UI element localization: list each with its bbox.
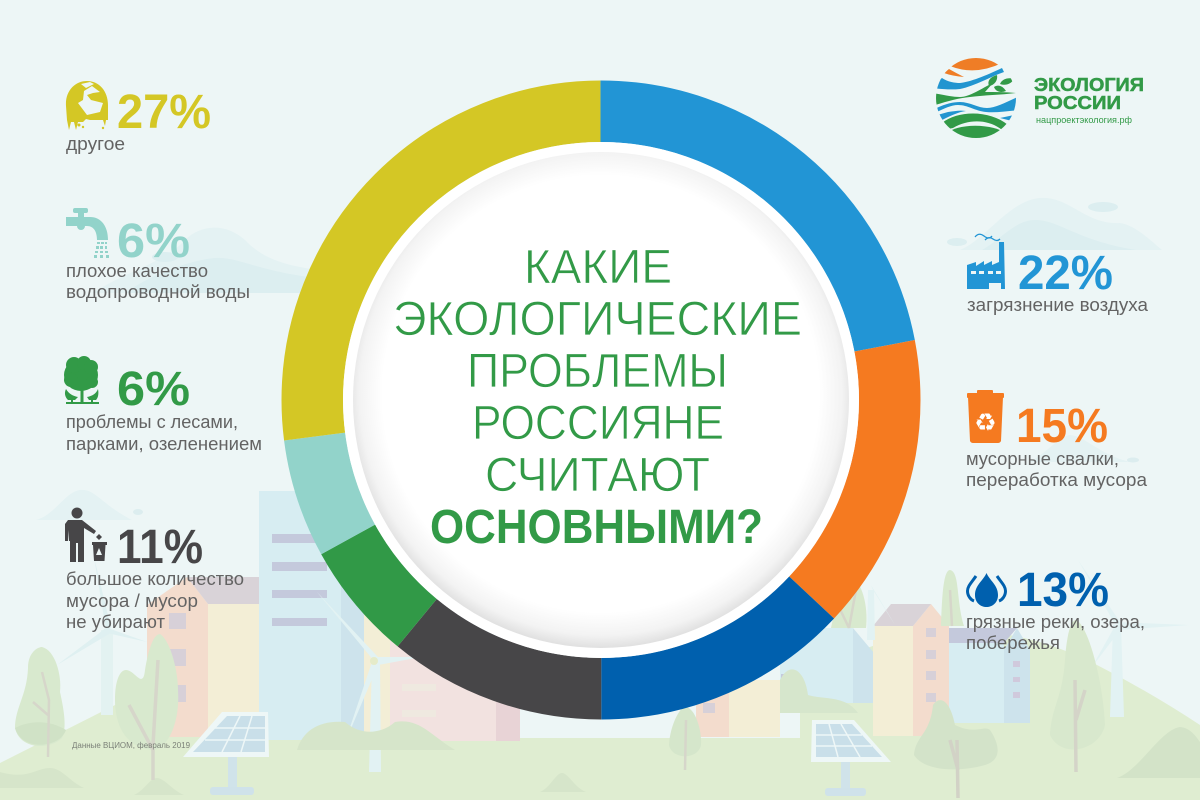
- logo url: нацпроектэкология.рф: [1036, 115, 1133, 125]
- logo wordmark: ЭКОЛОГИЯ: [1034, 75, 1144, 95]
- label: водопроводной воды: [66, 281, 250, 302]
- label: [966, 448, 1148, 490]
- source note: Данные ВЦИОМ, февраль 2019: [72, 741, 191, 750]
- title: ОСНОВНЫМИ?: [430, 501, 763, 554]
- title: СЧИТАЮТ: [485, 449, 710, 502]
- label: парками, озеленением: [66, 433, 262, 454]
- label: [966, 611, 1145, 653]
- item: 13% rivers: [966, 564, 1145, 653]
- icon: recycling bin: ♻: [974, 408, 997, 437]
- icon: melting globe: [66, 81, 108, 130]
- segment: 6% tap water: [312, 111, 890, 689]
- logo emblem: [936, 58, 1016, 138]
- background: mountains and clouds: [36, 198, 1162, 520]
- logo wordmark: РОССИИ: [1034, 93, 1121, 113]
- value: 6%: [117, 215, 190, 268]
- label: другое: [66, 133, 125, 154]
- center circle: [343, 142, 859, 658]
- label: большое количество: [66, 568, 244, 589]
- title: КАКИЕ: [524, 241, 672, 294]
- item: 6% tap water: [66, 208, 250, 302]
- label: [66, 568, 244, 632]
- label: плохое качество: [66, 260, 208, 281]
- logo: [936, 58, 1143, 138]
- label: грязные реки, озера,: [966, 611, 1145, 632]
- segment: 27% other: [312, 111, 890, 689]
- label: переработка мусора: [966, 469, 1148, 490]
- label: не убирают: [66, 611, 166, 632]
- value: 27%: [117, 86, 211, 139]
- title: ЭКОЛОГИЧЕСКИЕ: [393, 293, 802, 346]
- title: РОССИЯНЕ: [472, 397, 724, 450]
- label: проблемы с лесами,: [66, 411, 238, 432]
- label: [66, 260, 250, 302]
- icon: trees: [64, 356, 99, 404]
- label: [66, 411, 262, 454]
- label: мусора / мусор: [66, 590, 198, 611]
- logo wordmark: [1034, 75, 1144, 113]
- segment: 15% dumps: [312, 111, 890, 689]
- item: 6% forests: [64, 356, 262, 454]
- background: central and right wind turbines: [317, 560, 1189, 772]
- background: green hills and ground: [0, 631, 1200, 800]
- donut chart: [312, 111, 890, 689]
- background: left wind turbine: [57, 557, 147, 715]
- title: [393, 241, 802, 554]
- item: 11% litter: [65, 508, 244, 632]
- value: 13%: [1017, 564, 1109, 617]
- icon: factory: [967, 234, 1005, 289]
- segment: 13% rivers: [312, 111, 890, 689]
- icon: water tap: [66, 208, 109, 258]
- label: мусорные свалки,: [966, 448, 1119, 469]
- segment: 11% litter: [312, 111, 890, 689]
- value: 11%: [117, 521, 203, 574]
- background: trees: [15, 570, 1105, 798]
- background: right buildings: [696, 604, 1030, 737]
- value: 22%: [1018, 247, 1113, 300]
- label: загрязнение воздуха: [967, 294, 1149, 315]
- segment: 22% air pollution: [312, 111, 890, 689]
- background: solar panels: [183, 712, 891, 796]
- label: побережья: [966, 632, 1060, 653]
- icon: recycling bin: [967, 390, 1004, 443]
- background: left buildings: [147, 491, 520, 741]
- icon: water drops: [968, 573, 1006, 607]
- item: 15% dumps: [966, 390, 1148, 490]
- value: 6%: [117, 363, 190, 416]
- icon: person with trash bin: [65, 508, 107, 562]
- item: 27% other: [66, 81, 211, 154]
- segment: 6% forests: [312, 111, 890, 689]
- title: ПРОБЛЕМЫ: [467, 345, 728, 398]
- value: 15%: [1016, 400, 1108, 453]
- item: 22% air pollution: [967, 234, 1149, 315]
